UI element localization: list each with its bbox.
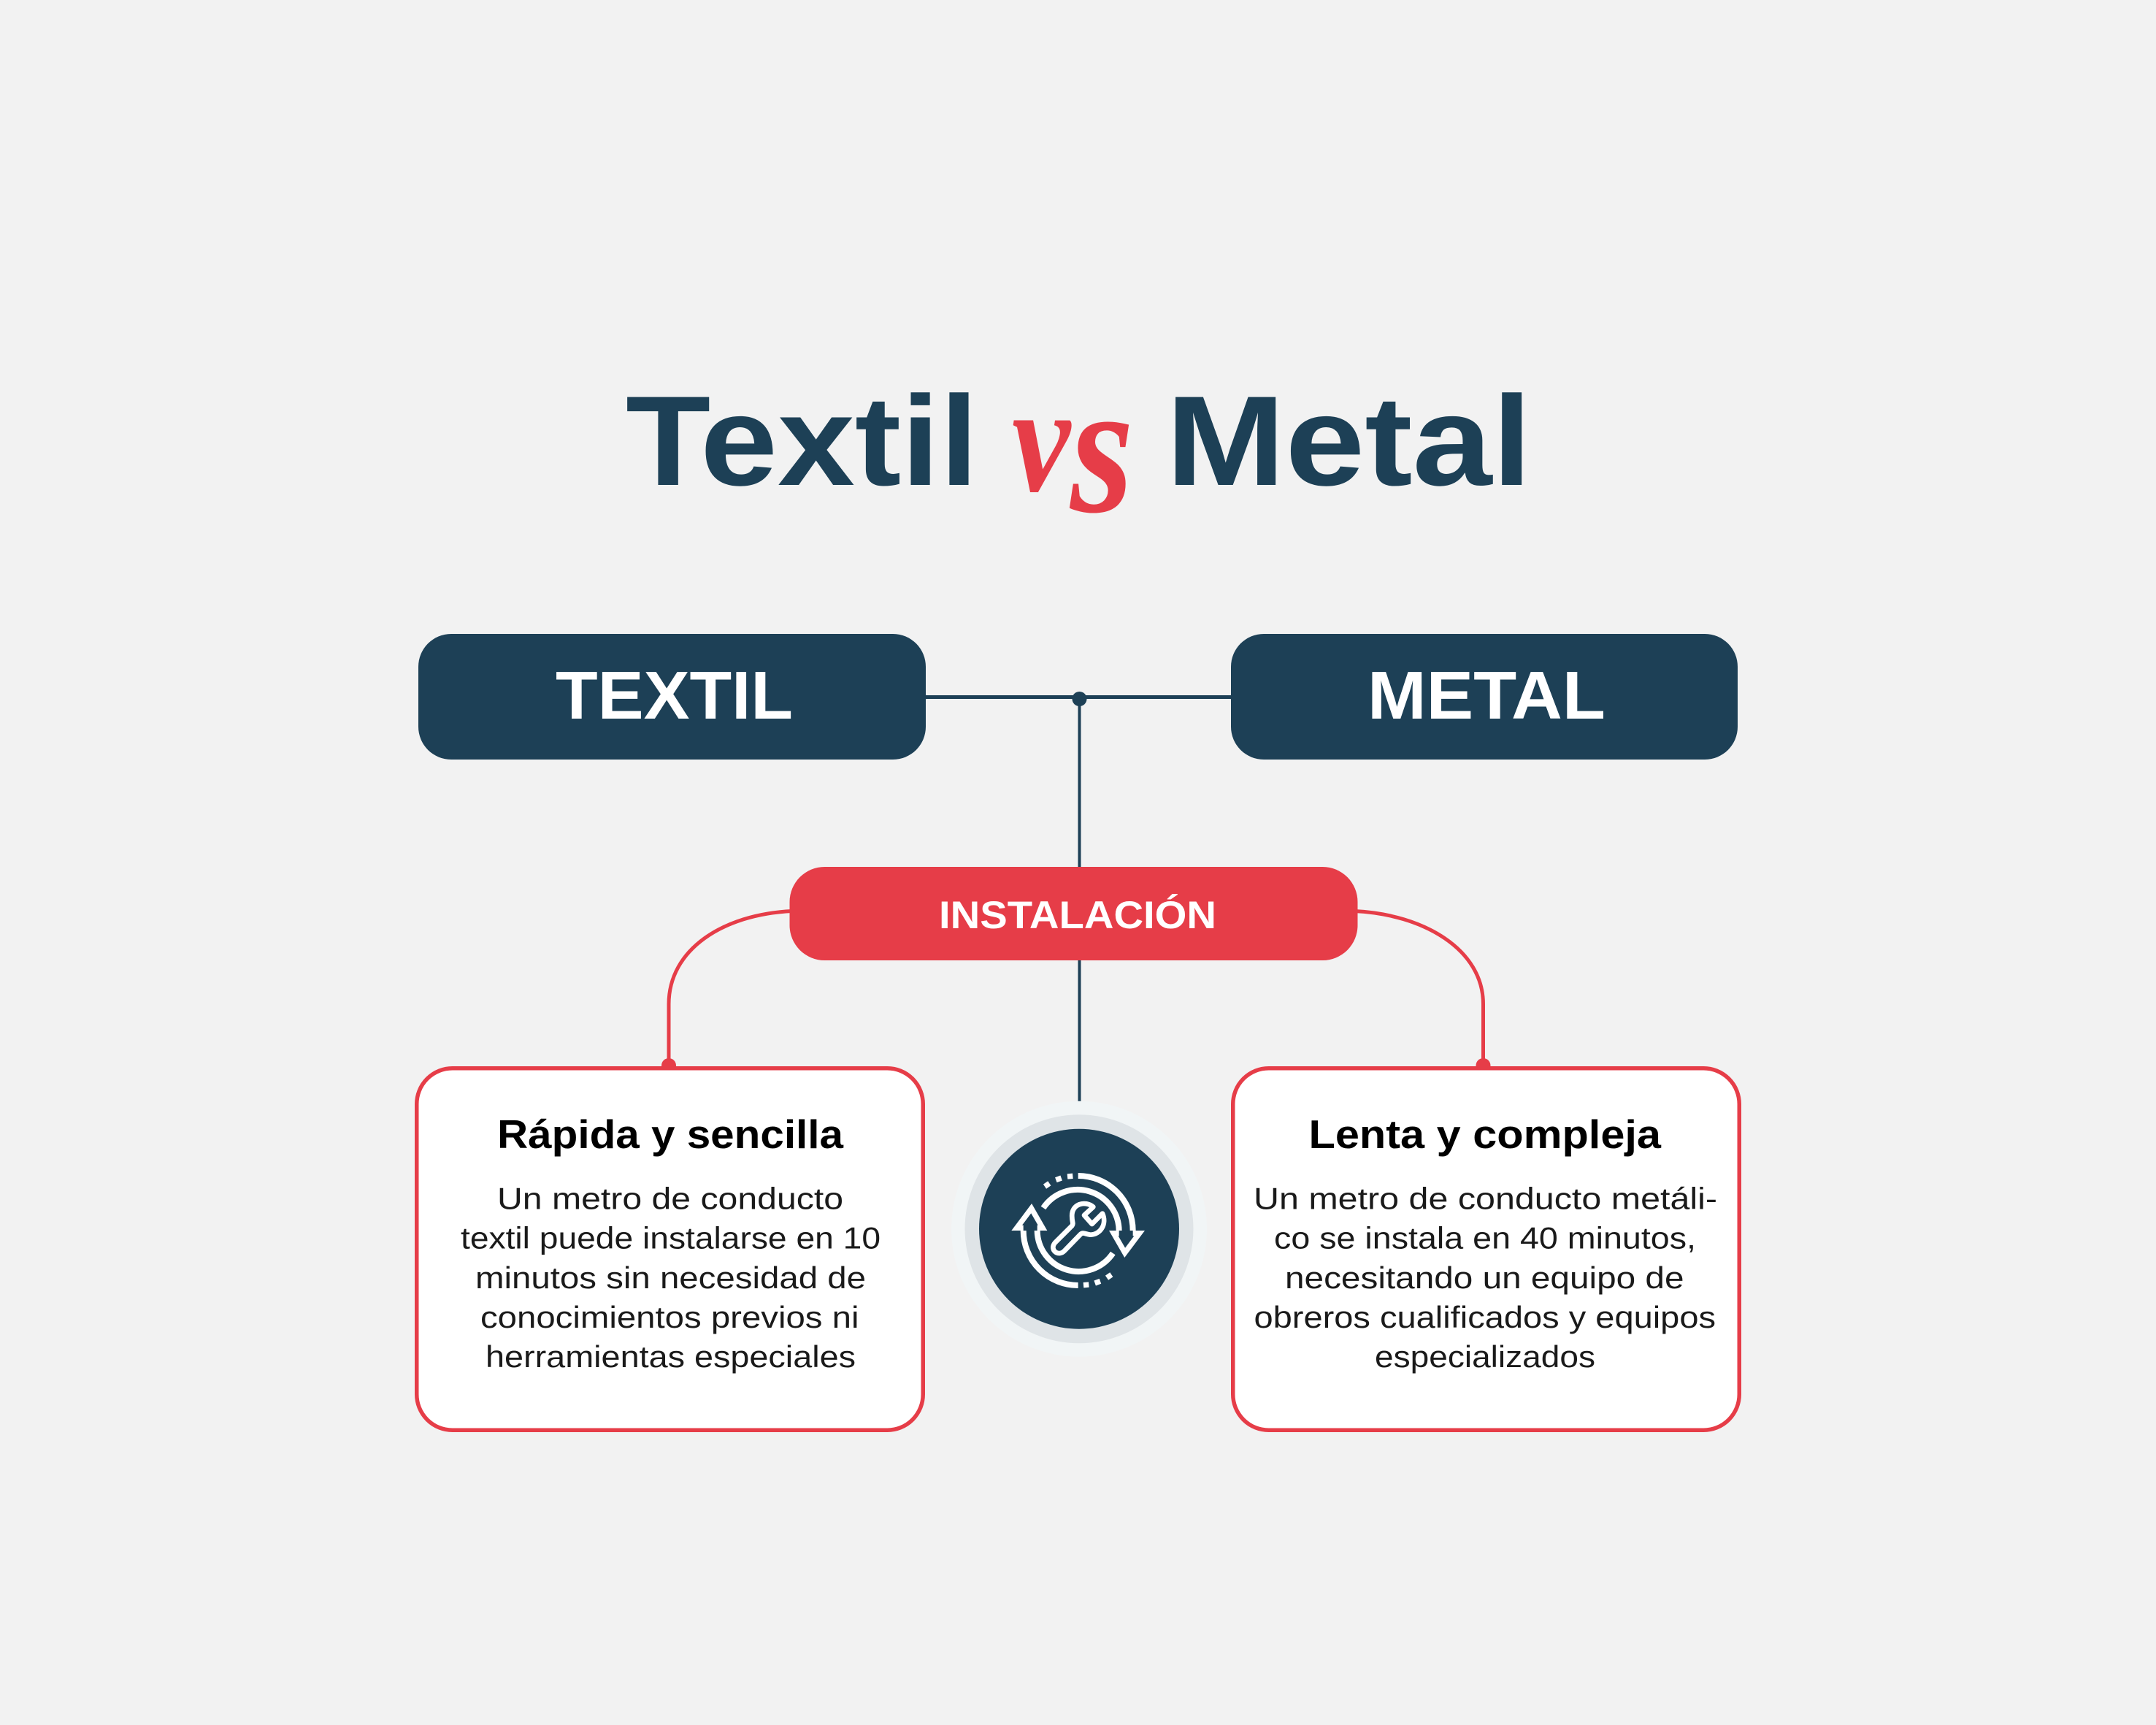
card body text: especializados — [1375, 1339, 1595, 1374]
card: Metal installation — [1233, 1068, 1739, 1430]
pill: INSTALACIÓN — [790, 867, 1358, 960]
title — [626, 343, 1532, 553]
connector: left curve — [661, 911, 792, 1073]
card body text: minutos sin necesidad de — [475, 1261, 866, 1295]
button: TEXTIL — [418, 634, 926, 760]
card body text: conocimientos previos ni — [480, 1300, 859, 1334]
card body text: textil puede instalarse en 10 — [461, 1221, 881, 1255]
title word: Metal: Metal — [1166, 370, 1532, 513]
card body text: co se instala en 40 minutos, — [1274, 1221, 1696, 1255]
pill: INSTALACIÓN: INSTALACIÓN — [939, 893, 1216, 937]
card heading: Lenta y compleja — [1308, 1112, 1661, 1157]
title word: Textil: Textil — [626, 370, 978, 513]
card: Textil installation — [417, 1068, 923, 1430]
button: TEXTIL: TEXTIL — [556, 657, 793, 733]
connector: right curve — [1354, 911, 1491, 1073]
icon: wrench in circular arrows — [951, 1101, 1207, 1357]
card heading: Rápida y sencilla — [497, 1112, 843, 1157]
card body text: obreros cualificados y equipos — [1254, 1300, 1716, 1334]
button: METAL: METAL — [1367, 657, 1606, 733]
title script: vs: v — [1012, 355, 1080, 524]
title script: vs: s — [1068, 343, 1134, 553]
button: METAL — [1231, 634, 1738, 760]
connector: top tree — [925, 692, 1232, 1101]
card body text — [461, 1182, 881, 1374]
card body text — [1254, 1182, 1717, 1374]
card body text: necesitando un equipo de — [1285, 1261, 1684, 1295]
card body text: herramientas especiales — [486, 1339, 856, 1374]
card body text: Un metro de conducto — [497, 1182, 843, 1215]
card body text: Un metro de conducto metáli- — [1254, 1182, 1717, 1215]
